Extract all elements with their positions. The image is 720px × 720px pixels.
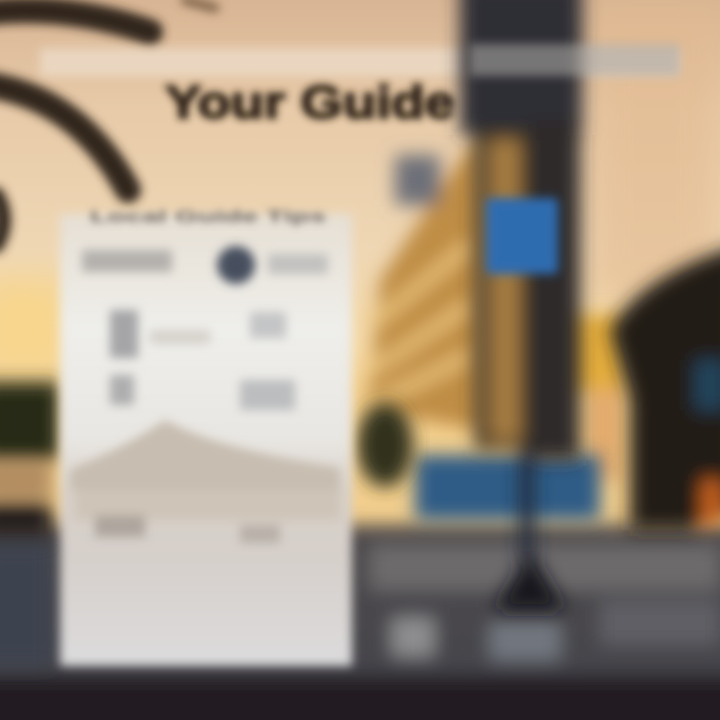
palm fronds — [0, 0, 215, 245]
poster illustration — [70, 420, 340, 543]
title — [40, 48, 680, 128]
building — [368, 130, 625, 480]
infographic poster panel — [60, 207, 352, 666]
sky background — [0, 0, 720, 560]
blue awning — [415, 455, 600, 520]
poster sheet — [60, 214, 352, 666]
left tree and wall — [0, 382, 60, 665]
street — [0, 525, 720, 720]
blue sign — [486, 198, 558, 274]
title band over pole — [470, 44, 680, 76]
poster heading: Local Guide Tips — [90, 207, 326, 226]
dark tree right — [610, 245, 720, 530]
title text: Your Guide — [165, 76, 455, 128]
right sky tint — [590, 0, 720, 300]
title band — [40, 48, 680, 76]
poster icons and text — [82, 246, 328, 410]
pole — [460, 0, 582, 610]
horizon glow — [0, 280, 70, 370]
bush — [357, 403, 413, 487]
